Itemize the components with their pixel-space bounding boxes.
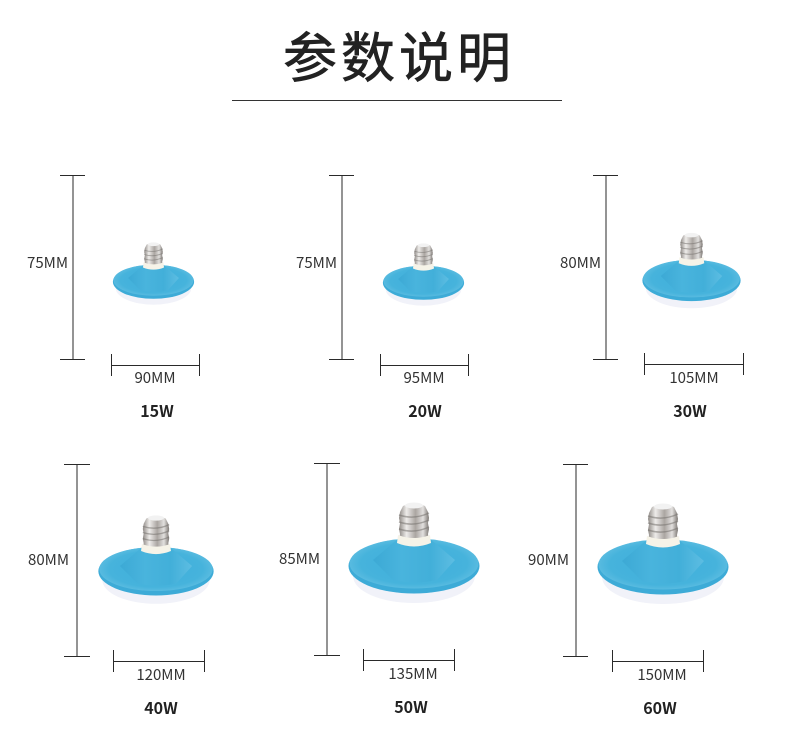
panel: 30W <box>560 176 744 422</box>
title: 参数说明 <box>283 14 515 93</box>
icon: 15W bulb <box>113 242 194 305</box>
height dimension 90MM <box>528 464 588 656</box>
wattage label: 15W <box>140 398 174 422</box>
icon: 20W bulb <box>383 243 464 306</box>
width dimension 105MM <box>644 353 744 388</box>
height dimension 85MM: 85MM <box>279 548 320 569</box>
height dimension 80MM <box>560 176 618 360</box>
width dimension 90MM <box>112 354 200 388</box>
width dimension 105MM: 105MM <box>669 367 719 388</box>
panel: 50W <box>279 464 480 718</box>
width dimension 150MM <box>612 650 704 685</box>
panel: 20W <box>296 176 468 422</box>
height dimension 80MM: 80MM <box>28 549 69 570</box>
wattage label: 60W <box>643 695 677 719</box>
width dimension 90MM: 90MM <box>134 367 176 388</box>
wattage label: 40W <box>144 695 178 719</box>
title underline <box>232 100 562 102</box>
height dimension 90MM: 90MM <box>528 549 569 570</box>
icon: 60W bulb <box>598 504 728 604</box>
width dimension 95MM <box>380 354 468 388</box>
height dimension 80MM: 80MM <box>560 252 601 273</box>
icon: 40W bulb <box>98 515 214 604</box>
height dimension 75MM <box>296 176 354 360</box>
height dimension 75MM <box>27 176 85 360</box>
width dimension 120MM: 120MM <box>136 664 186 685</box>
panel: 40W <box>28 464 214 719</box>
width dimension 150MM: 150MM <box>637 664 687 685</box>
icon: 50W bulb <box>348 502 480 603</box>
height dimension 80MM <box>28 464 90 656</box>
icon: 30W bulb <box>642 233 741 308</box>
panel: 15W <box>27 176 200 422</box>
wattage label: 50W <box>394 694 428 718</box>
height dimension 75MM: 75MM <box>296 252 337 273</box>
width dimension 135MM: 135MM <box>388 663 438 684</box>
wattage label: 30W <box>673 398 707 422</box>
height dimension 75MM: 75MM <box>27 252 68 273</box>
width dimension 95MM: 95MM <box>403 367 445 388</box>
width dimension 120MM <box>114 650 204 685</box>
wattage label: 20W <box>408 398 442 422</box>
height dimension 85MM <box>279 464 340 656</box>
width dimension 135MM <box>364 649 454 684</box>
panel: 60W <box>528 464 728 719</box>
